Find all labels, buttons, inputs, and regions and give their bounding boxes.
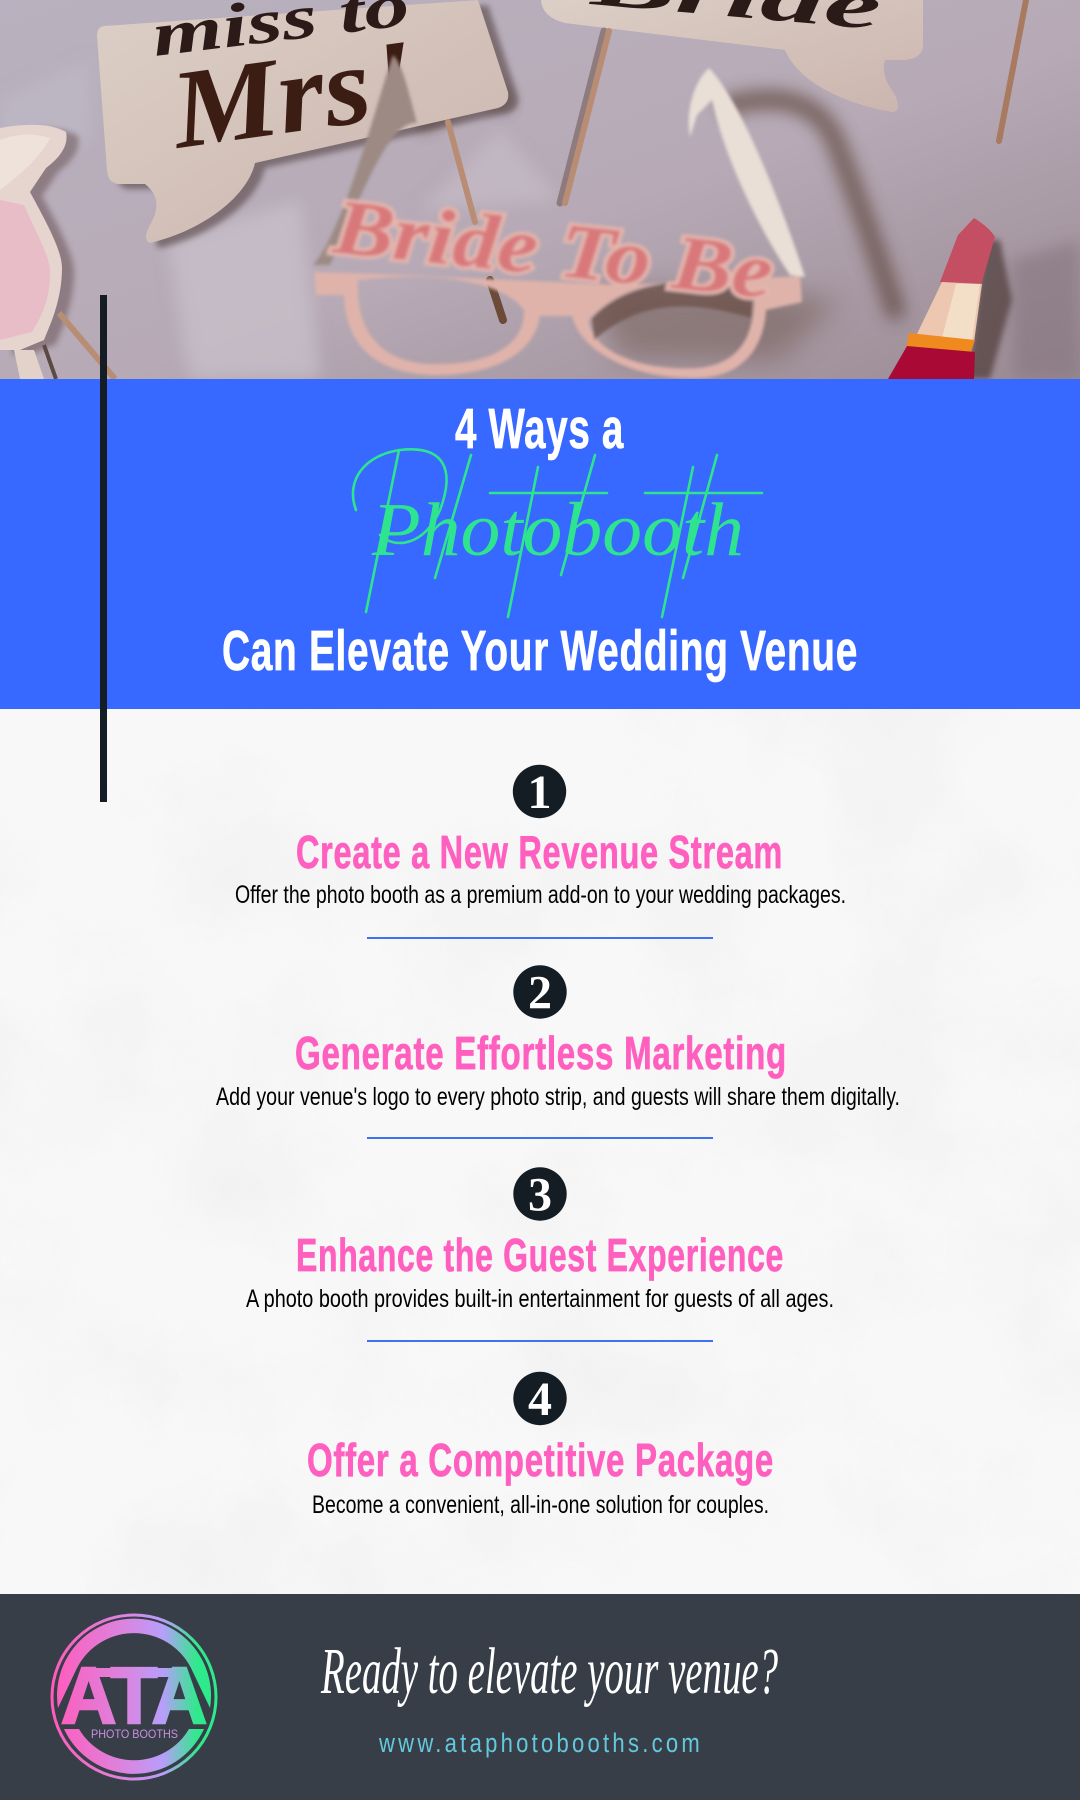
step 1 description: Offer the photo booth as a premium add-on to your wedding packages. (235, 881, 846, 909)
number badge 4: 4 (528, 1373, 552, 1426)
sign: miss to Mrs: Mrs! (162, 16, 424, 173)
steps panel background (0, 709, 1080, 1595)
step 2 (216, 965, 900, 1111)
script word: Photobooth: Photobooth (371, 488, 744, 572)
step 4 description: Become a convenient, all-in-one solution for couples. (312, 1491, 769, 1519)
step 1 (235, 765, 846, 909)
footer (0, 1594, 1080, 1800)
step 4 (307, 1372, 774, 1519)
photo glasses: Bride To Be (313, 55, 805, 378)
title banner (0, 379, 1080, 709)
number badge 1 (513, 765, 566, 819)
number badge 2: 2 (528, 966, 552, 1020)
logo: ATA Photo Booths: ATA (61, 1651, 207, 1740)
number badge 1: 1 (528, 766, 552, 819)
sign: Bride (541, 0, 923, 112)
lipstick (888, 218, 1012, 379)
sign: miss to Mrs (97, 0, 518, 248)
script word: Photobooth (353, 449, 762, 617)
logo: ATA Photo Booths: PHOTO BOOTHS (91, 1727, 178, 1741)
number badge 2 (513, 965, 567, 1020)
step 1 heading: Create a New Revenue Stream (296, 826, 783, 878)
number badge 4 (513, 1372, 567, 1426)
step 3 description: A photo booth provides built-in entertainment for guests of all ages. (246, 1285, 834, 1313)
fabric folds (171, 142, 1080, 379)
photo glasses: Bride To Be: Bride To Be (329, 182, 777, 315)
number badge 3 (513, 1167, 567, 1222)
header photo: photo booth props on fabric (0, 0, 1080, 379)
logo: ATA Photo Booths (52, 1615, 216, 1779)
timeline bar (100, 295, 107, 802)
script call to action: Ready to elevate your venue? (320, 1635, 778, 1708)
step 3 heading: Enhance the Guest Experience (296, 1229, 784, 1281)
step 2 heading: Generate Effortless Marketing (295, 1027, 787, 1079)
step 2 description: Add your venue's logo to every photo strip, and guests will share them digitally. (216, 1083, 900, 1111)
shadow of glasses arm (425, 91, 895, 310)
wooden sticks (448, 0, 1026, 320)
heading line 1: 4 Ways a (455, 397, 624, 461)
step 3 (246, 1167, 834, 1313)
number badge 3: 3 (528, 1168, 552, 1222)
left prop: drink with heart (0, 125, 115, 379)
website url: www.ataphotobooths.com (378, 1728, 703, 1758)
step 4 heading: Offer a Competitive Package (307, 1434, 774, 1486)
